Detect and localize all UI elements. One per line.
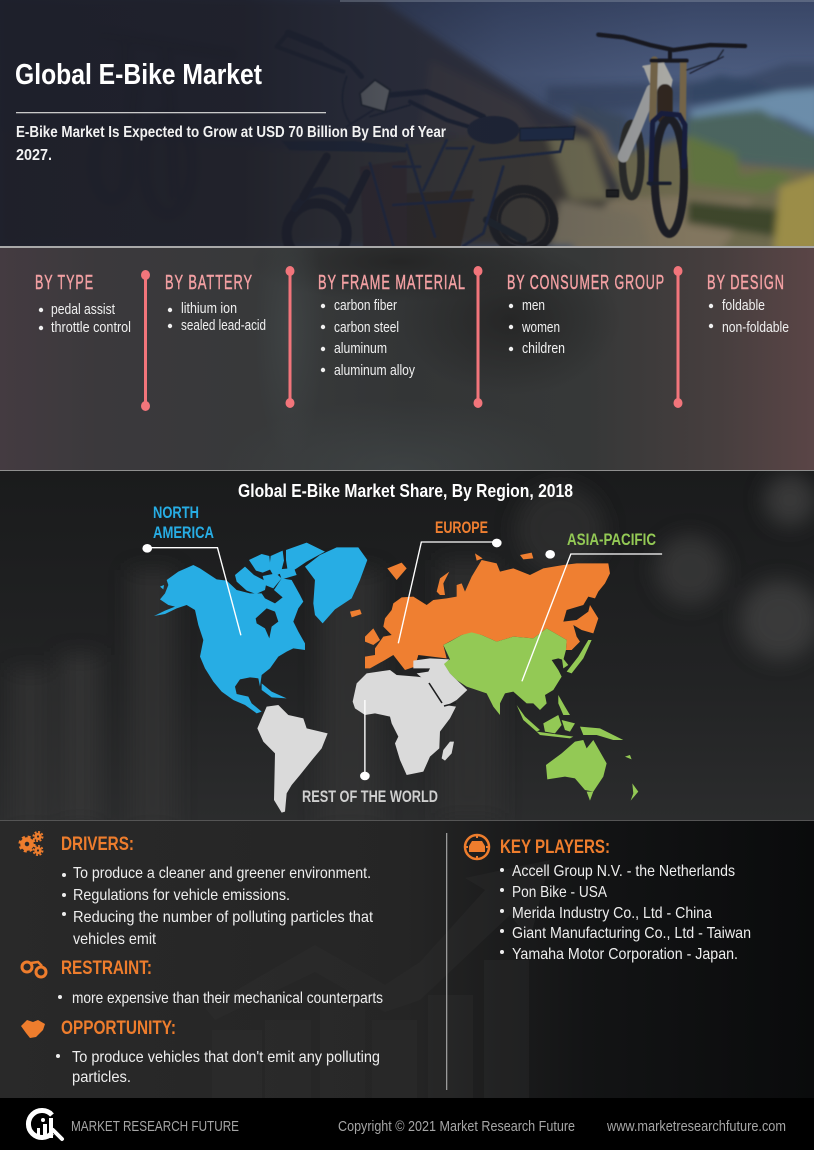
list: drivers: vehicles emit [73, 931, 156, 948]
panel: market dynamics [0, 821, 814, 1100]
region: asia pacific [443, 628, 638, 801]
brand and copyright: www.marketresearchfuture.com [606, 1118, 786, 1135]
heading: drivers: DRIVERS: [61, 834, 134, 855]
list: key players: Giant Manufacturing Co., Ltd - Taiwan [512, 925, 751, 942]
lists [39, 298, 789, 379]
list: drivers [62, 865, 373, 948]
lists: non-foldable [722, 320, 789, 336]
icon: gears [20, 832, 43, 855]
list: key players: Yamaha Motor Corporation - Japan. [512, 946, 738, 963]
map labels: REST OF THE WORLD [302, 788, 438, 806]
headings: BY BATTERY [165, 272, 253, 294]
region: north america [154, 543, 367, 713]
headings: BY TYPE [35, 272, 94, 294]
list: key players: Accell Group N.V. - the Netherlands [512, 863, 735, 880]
lists: pedal assist [51, 302, 115, 318]
icon: key players target [464, 834, 490, 860]
brand and copyright [71, 1118, 786, 1135]
subtitle: E-Bike Market Is Expected to Grow at USD 70 Billion By End of Year [16, 124, 446, 141]
headings: BY FRAME MATERIAL [318, 272, 466, 294]
map labels [153, 504, 656, 806]
map labels: NORTH [153, 504, 199, 522]
lists: children [522, 341, 565, 357]
red sea [429, 683, 456, 706]
dividers [141, 266, 682, 411]
brand and copyright: MARKET RESEARCH FUTURE [71, 1118, 239, 1135]
subtitle: 2027. [16, 147, 52, 164]
icon: faded bike at left [94, 35, 235, 215]
world map [142, 539, 662, 813]
list: key players: Pon Bike - USA [512, 884, 607, 901]
list: drivers: Reducing the number of polluting particles that [73, 909, 373, 926]
chart title: Global E-Bike Market Share, By Region, 2018 [238, 481, 573, 501]
map labels: AMERICA [153, 524, 214, 542]
lists: carbon steel [334, 320, 399, 336]
mountain slope [216, 0, 622, 246]
footer [0, 1098, 814, 1150]
lists: aluminum alloy [334, 363, 416, 379]
lists: sealed lead-acid [181, 318, 266, 334]
list: key players: Merida Industry Co., Ltd - China [512, 905, 712, 922]
lists: men [522, 298, 545, 314]
title: Global E-Bike Market [15, 59, 262, 91]
icon: handcuffs [22, 962, 46, 977]
panel: map section [0, 471, 814, 830]
leader lines [142, 539, 662, 780]
region: europe and russia [350, 553, 610, 670]
divider [446, 833, 447, 1090]
brand and copyright: Copyright © 2021 Market Research Future [338, 1118, 575, 1135]
list: drivers: Regulations for vehicle emissions. [73, 887, 290, 904]
icon: centre bike [283, 48, 576, 246]
region: rest of world [257, 658, 467, 813]
panel: header photo [0, 0, 814, 263]
icon: handshake [21, 1020, 45, 1038]
lists: carbon fiber [334, 298, 397, 314]
subtitle [16, 124, 446, 164]
map labels: EUROPE [435, 519, 488, 537]
list: opportunity: To produce vehicles that don't emit any polluting [72, 1049, 380, 1066]
heading: key players: KEY PLAYERS: [500, 837, 610, 858]
list: drivers: To produce a cleaner and greener environment. [73, 865, 371, 882]
lists: throttle control [51, 320, 131, 336]
heading: restraint: RESTRAINT: [61, 958, 152, 979]
heading: opportunity: OPPORTUNITY: [61, 1018, 176, 1039]
lists: women [521, 320, 560, 336]
headings [35, 272, 785, 294]
landscape [547, 63, 814, 253]
lists: foldable [722, 298, 765, 314]
list: key players [500, 863, 751, 963]
list: opportunity: particles. [72, 1069, 131, 1086]
headings: BY CONSUMER GROUP [507, 272, 665, 294]
lists: lithium ion [181, 301, 237, 317]
faded growth chart [205, 860, 550, 1100]
icon: right bike [598, 35, 745, 234]
lists: aluminum [334, 341, 387, 357]
map labels: ASIA-PACIFIC [567, 531, 656, 549]
list: opportunity [56, 1049, 380, 1086]
list: restraint: more expensive than their mechanical counterparts [72, 990, 383, 1007]
icon: logo [28, 1110, 62, 1139]
panel: segmentation [0, 248, 814, 470]
